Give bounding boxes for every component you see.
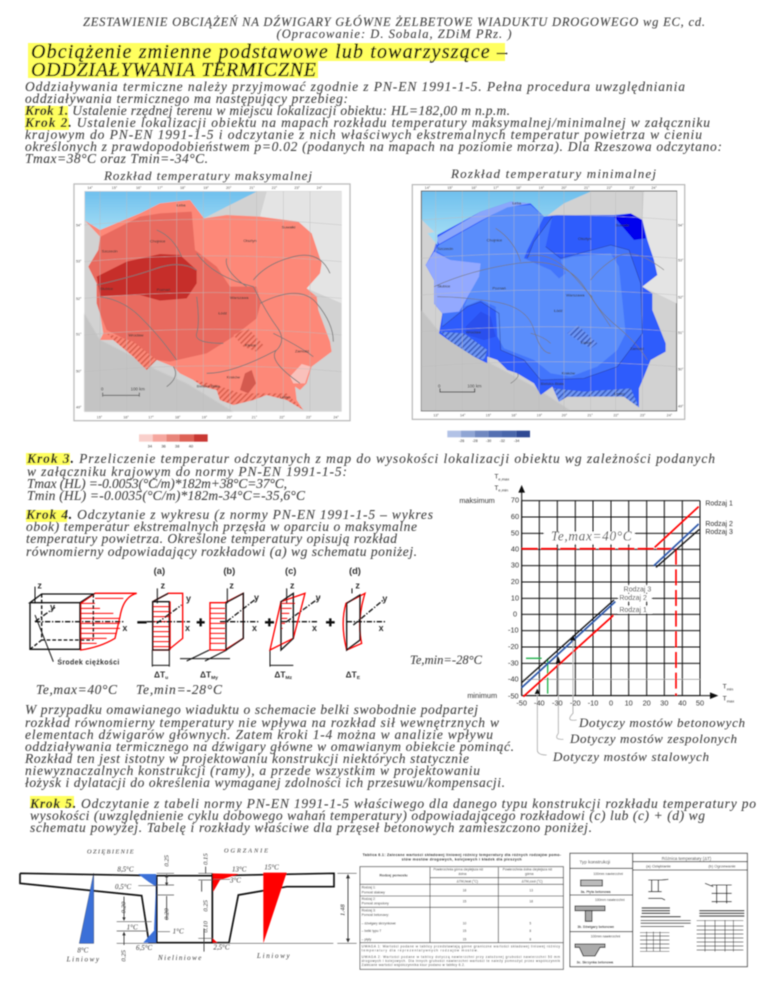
chart: effective temperature vs air temperature: 70: [511, 496, 519, 505]
table: linear temperature differences: – płyty: [362, 938, 372, 942]
map: minimum temperature: 53°: [678, 259, 684, 263]
diagram: temperature profile decomposition: Mz: [285, 675, 293, 681]
map: maximum temperature: 20°: [226, 186, 232, 190]
chart: effective temperature vs air temperature: [459, 474, 734, 755]
diagram: temperature profile decomposition: Środek ciężkości: [57, 657, 119, 666]
table: linear temperature differences: 15: [463, 929, 467, 933]
map: minimum temperature: Poznań: [492, 285, 506, 290]
map: minimum temperature: 24°: [651, 186, 657, 190]
table: non-linear temperature differences: Typ konstrukcji: [579, 859, 610, 864]
chart: effective temperature vs air temperature: 20: [511, 577, 519, 586]
table: linear temperature differences: stów mostów drogowych, kolejowych i kładek dla pieszych: [402, 858, 522, 862]
map: maximum temperature: Poznań: [157, 287, 170, 292]
diagram: bridge cross-section with temperature distributions: 6,5°C: [136, 944, 153, 952]
map: minimum temperature: 24°: [667, 414, 673, 418]
map: minimum temperature: 49°: [678, 404, 684, 408]
diagram: bridge cross-section with temperature distributions: Liniowy: [256, 952, 291, 960]
map: minimum temperature: 22°: [607, 186, 613, 190]
table: linear temperature differences: Pomost zespolony: [362, 902, 389, 906]
table: linear temperature differences: Powierzchnia dolna cieplejsza niż: [503, 868, 553, 872]
diagram: bridge cross-section with temperature distributions: 1°C: [173, 928, 184, 936]
map: maximum temperature: [74, 184, 350, 421]
map: maximum temperature: 17°: [157, 186, 163, 190]
map: minimum temperature: 19°: [539, 186, 545, 190]
diagram: bridge cross-section with temperature distributions: [20, 848, 357, 963]
diagram: temperature profile decomposition: z: [355, 580, 360, 590]
table: non-linear temperature differences: Różnica temperatury (ΔT): [662, 856, 712, 861]
chart: effective temperature vs air temperature: 10: [511, 593, 519, 602]
map: minimum temperature: Suwałki: [616, 223, 630, 228]
map: minimum temperature: Szczecin: [437, 246, 453, 251]
legend: min temperature: -32: [500, 439, 505, 443]
map: maximum temperature: 19°: [202, 415, 208, 419]
diagram: temperature profile decomposition: (d): [349, 566, 361, 576]
table: linear temperature differences: 18: [463, 888, 467, 892]
paragraph: uniform temperature: Rozkład ten jest istotny w projektowaniu konstrukcji niektórych statycznie: [24, 751, 469, 766]
diagram: temperature profile decomposition: x: [312, 623, 317, 633]
legend: max temperature: 36: [161, 444, 167, 449]
table: non-linear temperature differences: 100mm nawierzchni: [593, 872, 623, 876]
legend: min temperature: -26: [459, 439, 464, 443]
table: linear temperature differences: temperatury dla reprezentatywnych rodzajów mostów.: [362, 949, 478, 953]
intro text block: określonych z prawdopodobieństwem p=0.02 (podanych na mapach na poziomie morza). Dla Rzeszowa odczytano:: [25, 139, 722, 154]
map: maximum temperature: Zamość: [295, 349, 309, 354]
chart: effective temperature vs air temperature: min: [727, 686, 733, 691]
map: maximum temperature: 50°: [76, 369, 82, 373]
map: minimum temperature: 22°: [613, 414, 619, 418]
map: minimum temperature: 54°: [678, 224, 684, 228]
callout: concrete bridges: Dotyczy mostów betonowych: [578, 715, 745, 730]
map: maximum temperature: 23°: [294, 186, 300, 190]
chart: effective temperature vs air temperature: Rodzaj 1: [705, 501, 733, 508]
chart: effective temperature vs air temperature: -10: [508, 626, 519, 635]
map: maximum temperature: 22°: [279, 415, 285, 419]
table: linear temperature differences: UWAGA 1: Wartości podane w tablicy przedstawiają górne graniczne wartości składowej liniowej różnicy: [362, 944, 560, 948]
map: maximum temperature: 0: [101, 387, 104, 392]
heading: highlighted: Obciążenie zmienne podstawowe lub towarzyszące –: [31, 41, 508, 63]
diagram: temperature profile decomposition: y: [254, 593, 259, 603]
map: minimum temperature: 15°: [486, 414, 492, 418]
map: maximum temperature: 20°: [227, 415, 233, 419]
map: minimum temperature: 20°: [562, 414, 568, 418]
diagram: bridge cross-section with temperature distributions: 1°C: [127, 924, 138, 932]
chart: effective temperature vs air temperature: 30: [660, 698, 668, 707]
table: linear temperature differences: 8: [529, 938, 531, 942]
table: linear temperature differences: drogowych i kolejowych. Dla innych grubości nawierzchni wartości te należy pomnożyć przez współczynnik: [362, 959, 560, 963]
map: maximum temperature: Suwałki: [282, 224, 296, 229]
diagram: bridge cross-section with temperature distributions: Liniowy: [66, 955, 100, 963]
legend: min temperature: -30: [486, 439, 491, 443]
map: maximum temperature: 21°: [252, 415, 258, 419]
text block: krok 5: [29, 796, 756, 835]
table: non-linear temperature differences: 100mm nawierzchni: [595, 898, 625, 902]
text block: krok 3: w załączniku krajowym do normy PN-EN 1991-1-5:: [27, 464, 347, 479]
legend: min temperature: [447, 431, 530, 443]
intro text block: Tmax=38°C oraz Tmin=-34°C.: [25, 151, 208, 166]
map: maximum temperature: 24°: [333, 415, 339, 419]
diagram: bridge cross-section with temperature distributions: 0.25: [163, 854, 170, 867]
diagram: temperature profile decomposition: (b): [223, 566, 235, 576]
paragraph: uniform temperature: W przypadku omawianego wiaduktu o schemacie belki swobodnie podpartej: [25, 702, 478, 717]
text block: krok 5: Krok 5. Odczytanie z tabeli normy PN-EN 1991-1-5 właściwego dla danego typu konstrukcji rozkładu temperatury po: [29, 796, 756, 811]
intro text block: Krok 2. Ustalenie lokalizacji obiektu na mapach rozkładu temperatury maksymalnej/minimalnej w załączniku: [24, 115, 710, 130]
table: linear temperature differences: 10: [463, 921, 467, 925]
chart: effective temperature vs air temperature: -20: [508, 642, 519, 651]
map: maximum temperature: 21°: [249, 186, 255, 190]
chart: effective temperature vs air temperature: 30: [511, 561, 519, 570]
chart: effective temperature vs air temperature: Te,max=40°C: [551, 529, 633, 544]
chart: effective temperature vs air temperature: -20: [570, 698, 581, 707]
chart: effective temperature vs air temperature: 50: [511, 528, 519, 537]
map: minimum temperature: Chojnice: [487, 237, 503, 242]
map: minimum temperature: 17°: [493, 186, 499, 190]
diagram: temperature profile decomposition: E: [357, 675, 361, 681]
text block: krok 3: Tmax (HL) =-0.0053(°C/m)*182m+38°C=37°C,: [27, 476, 287, 491]
map: minimum temperature: Kielce: [581, 340, 592, 345]
diagram: bridge cross-section with temperature distributions: 0,5°C: [115, 883, 132, 891]
paragraph: uniform temperature: elementach dźwigarów głównych. Zatem kroki 1-4 można w analizie wpływu: [25, 727, 493, 742]
diagram: bridge cross-section with temperature distributions: 0.20: [121, 901, 128, 913]
text block: krok 5: schematu powyżej. Tabelę i rozkłady właściwe dla przęseł betonowych zamieszczono poniżej.: [30, 820, 592, 835]
table: linear temperature differences: górna: [525, 872, 534, 876]
map: maximum temperature: Szczecin: [102, 249, 118, 254]
text block: krok 3: [26, 451, 715, 503]
diagram: bridge cross-section with temperature distributions: 0.25: [202, 899, 209, 912]
table: non-linear temperature differences: (a) Oziębianie: [646, 864, 672, 869]
map: maximum temperature: 100 km: [131, 387, 145, 392]
table: linear temperature differences: dolna: [458, 872, 467, 876]
map: minimum temperature: Wrocław: [466, 329, 481, 334]
chart: effective temperature vs air temperature: -40: [508, 674, 519, 683]
chart: effective temperature vs air temperature: -50: [508, 691, 519, 700]
map: minimum temperature: 19°: [537, 414, 543, 418]
map: minimum temperature: Kraków: [562, 370, 575, 375]
table: linear temperature differences: [360, 853, 563, 969]
map: maximum temperature: 17°: [148, 415, 154, 419]
text block: krok 4: temperatury powietrza. Określone temperatury opisują rozkład: [26, 531, 397, 546]
diagram: bridge cross-section with temperature distributions: OZIĘBIENIE: [87, 848, 134, 855]
map: minimum temperature: 100 km: [467, 383, 482, 388]
paragraph: uniform temperature: [24, 702, 514, 790]
map: minimum temperature: Lesko: [614, 391, 625, 396]
chart: effective temperature vs air temperature: max: [727, 698, 734, 703]
diagram: temperature profile decomposition: x: [122, 623, 127, 633]
map: minimum temperature: Olsztyn: [578, 236, 591, 241]
map: minimum temperature: [412, 185, 685, 419]
map: minimum temperature: 16°: [471, 186, 477, 190]
legend: max temperature: 40: [189, 444, 194, 449]
table: linear temperature differences: Rodzaj 3:: [362, 908, 376, 912]
map: minimum temperature: Zamość: [630, 346, 644, 351]
map: maximum temperature: 16°: [136, 186, 142, 190]
table: linear temperature differences: – dźwigary skrzynkowe: [362, 921, 396, 925]
diagram: bridge cross-section with temperature distributions: 8,5°C: [117, 865, 134, 873]
map: minimum temperature: 23°: [629, 186, 635, 190]
diagram: bridge cross-section with temperature distributions: 0.25: [121, 949, 128, 962]
intro text block: Krok 1. Ustalenie rzędnej terenu w miejscu lokalizacji obiektu: HL=182,00 m n.p.m.: [24, 103, 510, 118]
intro text block: krajowym do PN-EN 1991-1-5 i odczytanie z nich właściwych ekstremalnych temperatur powietrza w cieniu: [25, 127, 702, 142]
callout: steel bridges: Dotyczy mostów stalowych: [552, 749, 709, 764]
map title: min: Rozkład temperatury minimalnej: [450, 166, 656, 181]
map: minimum temperature: Łódź: [554, 308, 563, 313]
map: minimum temperature: Bielsko-Biała: [541, 381, 564, 386]
table: linear temperature differences: 15: [463, 900, 467, 904]
diagram: bridge cross-section with temperature distributions: 13°C: [232, 865, 247, 873]
table: linear temperature differences: 5: [529, 921, 531, 925]
intro text block: Oddziaływania termiczne należy przyjmować zgodnie z PN-EN 1991-1-5. Pełna procedura uwzględniania: [25, 79, 685, 94]
annotation: Te,min right: Te,min=-28°C: [410, 653, 483, 667]
map: minimum temperature: 0: [438, 383, 441, 388]
table: linear temperature differences: Rodzaj pomostu: [379, 874, 408, 878]
map title: max: Rozkład temperatury maksymalnej: [103, 168, 312, 183]
chart: effective temperature vs air temperature: minimum: [467, 691, 497, 700]
diagram: bridge cross-section with temperature distributions: 15°C: [264, 863, 279, 871]
diagram: temperature profile decomposition: ΔT: [154, 669, 165, 679]
text block: krok 4: [25, 507, 433, 559]
map: maximum temperature: 22°: [272, 186, 278, 190]
table: non-linear temperature differences: 3b. Dźwigary betonowe: [577, 925, 614, 929]
chart: effective temperature vs air temperature: Rodzaj 1: [619, 607, 647, 614]
legend: max temperature: 38: [175, 444, 180, 449]
chart: effective temperature vs air temperature: T: [494, 485, 498, 492]
map: maximum temperature: 54°: [76, 224, 82, 228]
table: linear temperature differences: ΔTM,cool (°C): [522, 879, 543, 883]
map: maximum temperature: Chojnice: [150, 239, 166, 244]
chart: effective temperature vs air temperature: -10: [588, 698, 598, 707]
map: minimum temperature: 23°: [640, 414, 646, 418]
paragraph: uniform temperature: oddziaływania termicznego na dźwigary główne w omawianym obiekcie pominąć.: [25, 739, 514, 754]
map: maximum temperature: 18°: [175, 415, 181, 419]
diagram: bridge cross-section with temperature distributions: OGRZANIE: [224, 848, 268, 855]
diagram: temperature profile decomposition: ΔT: [200, 669, 211, 679]
paragraph: uniform temperature: niewyznaczalnych konstrukcji (ramy), a przede wszystkim w projektowaniu: [25, 763, 480, 778]
chart: effective temperature vs air temperature: e,min: [498, 488, 508, 493]
table: linear temperature differences: Zalecane wartości współczynnika ksur podano w tablicy 6.2.: [362, 963, 465, 967]
map: maximum temperature: 23°: [306, 415, 312, 419]
diagram: temperature profile decomposition: (c): [285, 566, 296, 576]
title: (Opracowanie: D. Sobala, ZDiM PRz. ): [276, 27, 512, 41]
table: linear temperature differences: 13: [529, 888, 533, 892]
paragraph: uniform temperature: łożysk i dylatacji do określenia wymaganej zdolności ich przesuwu/kompensacji.: [25, 775, 505, 790]
diagram: bridge cross-section with temperature distributions: 1.48: [339, 904, 346, 916]
intro text block: [24, 79, 722, 166]
chart: effective temperature vs air temperature: Rodzaj 2: [705, 521, 733, 528]
diagram: temperature profile decomposition: My: [211, 675, 218, 681]
map: maximum temperature: Kraków: [227, 374, 240, 379]
chart: effective temperature vs air temperature: 60: [511, 512, 519, 521]
annotation: Te,min bottom: Te,min=-28°C: [136, 682, 223, 697]
map: maximum temperature: Łódź: [218, 310, 227, 315]
table: linear temperature differences: Rodzaj 1:: [362, 886, 376, 890]
chart: effective temperature vs air temperature: 10: [625, 698, 633, 707]
chart: effective temperature vs air temperature: 20: [643, 698, 651, 707]
diagram: bridge cross-section with temperature distributions: 0.20: [163, 908, 170, 920]
chart: effective temperature vs air temperature: e,max: [498, 476, 509, 481]
chart: effective temperature vs air temperature: maksimum: [459, 496, 495, 505]
table: non-linear temperature differences: 3c. Skrzynka betonowa: [577, 961, 613, 965]
diagram: temperature profile decomposition: y: [382, 594, 387, 604]
map: maximum temperature: Wrocław: [128, 333, 144, 338]
annotation: Te,max bottom: Te,max=40°C: [36, 682, 118, 697]
diagram: bridge cross-section with temperature distributions: 2,5°C: [213, 944, 230, 952]
chart: effective temperature vs air temperature: Rodzaj 3: [624, 586, 651, 593]
text block: krok 4: obok) temperatur ekstremalnych przęsła w oparciu o maksymalne: [26, 519, 417, 534]
map: maximum temperature: Łeba: [177, 203, 186, 208]
table: linear temperature differences: 8: [529, 929, 531, 933]
table: non-linear temperature differences: (b) Ogrzewanie: [708, 864, 736, 869]
map: maximum temperature: 53°: [76, 260, 82, 264]
diagram: temperature profile decomposition: x: [379, 623, 384, 633]
chart: effective temperature vs air temperature: -30: [508, 658, 519, 667]
map: maximum temperature: Olsztyn: [243, 238, 257, 243]
diagram: temperature profile decomposition: (a): [154, 566, 165, 576]
map: maximum temperature: 51°: [76, 333, 82, 337]
map: minimum temperature: 16°: [511, 414, 517, 418]
map: minimum temperature: 21°: [587, 414, 593, 418]
diagram: temperature profile decomposition: ΔT: [274, 669, 285, 679]
diagram: temperature profile decomposition: y: [50, 602, 55, 612]
map: minimum temperature: 18°: [516, 186, 522, 190]
diagram: bridge cross-section with temperature distributions: 8°C: [77, 947, 89, 955]
legend: max temperature: [139, 434, 208, 449]
map: minimum temperature: 21°: [584, 186, 590, 190]
chart: effective temperature vs air temperature: 50: [696, 698, 704, 707]
map: maximum temperature: 24°: [317, 186, 323, 190]
text block: krok 3: Tmin (HL) =-0.0035(°C/m)*182m-34°C=-35,6°C: [27, 488, 306, 503]
map: maximum temperature: 52°: [76, 297, 82, 301]
map: minimum temperature: Słubice: [437, 283, 451, 288]
table: linear temperature differences: 18: [529, 900, 533, 904]
chart: effective temperature vs air temperature: 0: [609, 698, 613, 707]
map: maximum temperature: Słubice: [100, 286, 114, 291]
text block: krok 5: wysokości (uwzględnienie cyklu dobowego wahań temperatury) odpowiadającego rozkładowi (c) lub (c) + (d) wg: [30, 808, 705, 823]
diagram: temperature profile decomposition: ΔT: [346, 669, 357, 679]
table: linear temperature differences: Tablica 6.1: Zalecane wartości składowej liniowej różnicy temperatury dla różnych rodzajów pomo-: [363, 853, 562, 857]
map: maximum temperature: 49°: [76, 405, 82, 409]
diagram: temperature profile decomposition: y: [316, 593, 321, 603]
diagram: temperature profile decomposition: x: [252, 623, 257, 633]
callout: composite bridges: Dotyczy mostów zespolonych: [569, 731, 737, 746]
diagram: bridge cross-section with temperature distributions: 0.15: [202, 853, 209, 865]
legend: max temperature: 34: [148, 444, 153, 449]
map: minimum temperature: 20°: [561, 186, 567, 190]
map: minimum temperature: 50°: [678, 368, 684, 372]
diagram: temperature profile decomposition: u: [165, 675, 168, 681]
diagram: temperature profile decomposition: z: [229, 580, 234, 590]
table: linear temperature differences: Powierzchnia górna cieplejsza niż: [433, 868, 484, 872]
diagram: temperature profile decomposition: z: [37, 580, 42, 590]
map: maximum temperature: Bielsko-Biała: [197, 383, 220, 388]
diagram: temperature profile decomposition: z: [161, 580, 166, 590]
diagram: temperature profile decomposition: [30, 566, 387, 681]
table: linear temperature differences: Pomost betonowy:: [362, 913, 389, 917]
map: maximum temperature: Lesko: [280, 394, 291, 399]
map: maximum temperature: Kielce: [245, 343, 257, 348]
map: maximum temperature: Warszawa: [230, 295, 249, 300]
heading: highlighted: ODDZIAŁYWANIA TERMICZNE: [31, 59, 316, 81]
map: maximum temperature: 14°: [87, 186, 93, 190]
table: linear temperature differences: UWAGA 2: Wartości podane w tablicy dotyczą nawierzchni przy założonej grubości nawierzchni 50 mm: [362, 955, 560, 959]
text block: krok 4: równomierny odpowiadający rozkładowi (a) wg schematu poniżej.: [26, 544, 417, 559]
table: linear temperature differences: Rodzaj 2:: [362, 897, 376, 901]
chart: effective temperature vs air temperature: Rodzaj 2: [619, 595, 647, 602]
table: non-linear temperature differences: 100mm nawierzchni: [591, 935, 621, 939]
legend: min temperature: -34: [514, 439, 519, 443]
chart: effective temperature vs air temperature: -50: [516, 698, 527, 707]
diagram: bridge cross-section with temperature distributions: 3°C: [229, 876, 241, 884]
chart: effective temperature vs air temperature: 40: [511, 544, 519, 553]
table: linear temperature differences: ΔTM,heat (°C): [457, 879, 478, 883]
chart: effective temperature vs air temperature: T: [494, 474, 498, 481]
intro text block: oddziaływania termicznego ma następujący przebieg:: [25, 91, 348, 106]
map: minimum temperature: 14°: [425, 186, 431, 190]
legend: min temperature: -28: [472, 439, 478, 443]
chart: effective temperature vs air temperature: T: [723, 696, 727, 703]
table: non-linear temperature differences: [570, 853, 747, 967]
chart: effective temperature vs air temperature: T: [723, 684, 727, 691]
diagram: temperature profile decomposition: y: [186, 594, 191, 604]
map: minimum temperature: Warszawa: [566, 293, 585, 298]
map: maximum temperature: 16°: [123, 415, 129, 419]
chart: effective temperature vs air temperature: 0: [513, 609, 517, 618]
map: maximum temperature: 15°: [97, 415, 103, 419]
text block: krok 4: Krok 4. Odczytanie z wykresu (z normy PN-EN 1991-1-5 – wykres: [25, 507, 433, 522]
diagram: temperature profile decomposition: z: [290, 580, 295, 590]
map: minimum temperature: 13°: [433, 414, 439, 418]
diagram: bridge cross-section with temperature distributions: Nieliniowe: [157, 954, 201, 962]
table: linear temperature differences: 15: [463, 938, 467, 942]
diagram: temperature profile decomposition: x: [185, 623, 190, 633]
map: minimum temperature: 52°: [678, 295, 684, 299]
table: linear temperature differences: Pomost stalowy: [362, 890, 385, 894]
paragraph: uniform temperature: rozkład równomierny temperatury nie wpływa na rozkład sił wewnętrznych w: [25, 715, 499, 730]
chart: effective temperature vs air temperature: 40: [678, 698, 686, 707]
heading: highlighted: [28, 41, 508, 81]
map: maximum temperature: 18°: [180, 186, 186, 190]
map: minimum temperature: 51°: [678, 331, 684, 335]
map: minimum temperature: 14°: [460, 414, 466, 418]
title: ZESTAWIENIE OBCIĄŻEŃ NA DŹWIGARY GŁÓWNE ŻELBETOWE WIADUKTU DROGOWEGO wg EC, cd.: [83, 15, 705, 29]
map: minimum temperature: 15°: [447, 186, 453, 190]
chart: effective temperature vs air temperature: -30: [552, 698, 563, 707]
title: [83, 15, 705, 41]
table: linear temperature differences: – belki typu T: [362, 929, 381, 933]
text block: krok 3: Krok 3. Przeliczenie temperatur odczytanych z map do wysokości lokalizacji obiektu wg zależności podanych: [26, 451, 715, 466]
map: minimum temperature: Łeba: [512, 201, 522, 206]
map: maximum temperature: 15°: [112, 186, 118, 190]
map: maximum temperature: 19°: [203, 186, 209, 190]
chart: effective temperature vs air temperature: Rodzaj 3: [705, 529, 733, 536]
chart: effective temperature vs air temperature: -40: [534, 698, 545, 707]
diagram: bridge cross-section with temperature distributions: 0.10: [202, 920, 209, 933]
table: non-linear temperature differences: 3a. Płyta betonowa: [581, 890, 611, 894]
